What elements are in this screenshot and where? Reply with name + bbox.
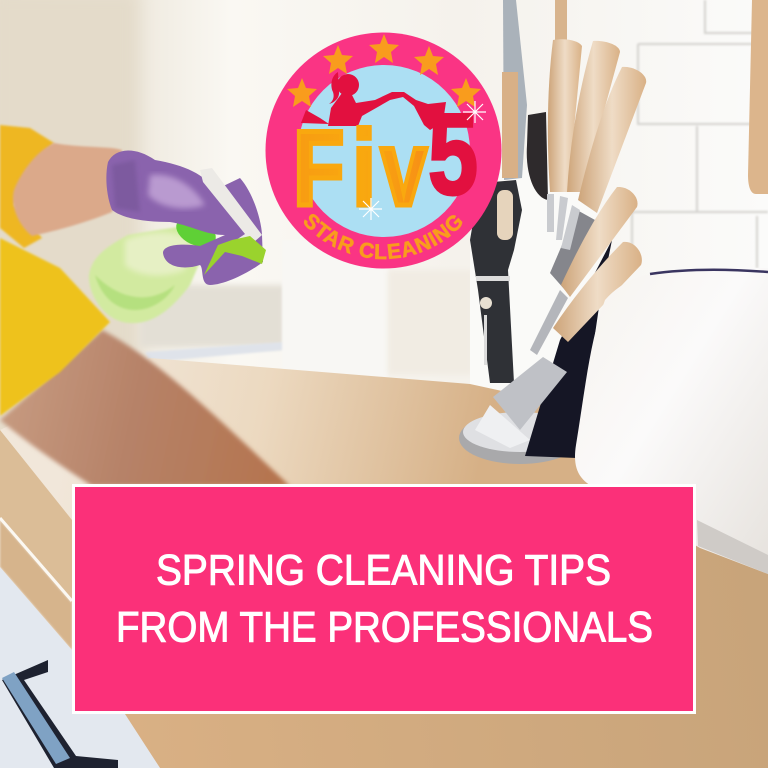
logo: five orange stars	[287, 34, 481, 107]
logo: Fiv wordmark: F	[293, 109, 344, 228]
logo: Fiv wordmark: i	[353, 109, 376, 228]
logo: red number 5: 5	[428, 91, 478, 219]
logo: Fiv5 Star Cleaning badge	[266, 32, 502, 268]
counter front edge and cabinet	[0, 430, 160, 768]
logo: light blue inner disc	[298, 65, 470, 237]
banner heading: FROM THE PROFESSIONALS	[116, 604, 653, 652]
photo: spray bottle	[89, 211, 221, 323]
logo: sparkle centre	[359, 198, 382, 220]
photo: hanging ladle	[503, 0, 567, 200]
logo: star cleaning curved text: STAR CLEANING	[304, 214, 462, 260]
photo: knife block	[459, 194, 612, 464]
photo: purple glove	[106, 150, 263, 285]
logo: cleaning lady silhouette	[301, 72, 446, 130]
countertop surface	[0, 358, 768, 768]
logo: Fiv wordmark: v	[381, 109, 427, 228]
photo: spray trigger	[200, 168, 266, 275]
banner: pink title panel	[74, 486, 694, 712]
photo: forearm in foreground	[0, 330, 290, 486]
photo: upper arm	[13, 143, 122, 236]
banner heading: SPRING CLEANING TIPS	[156, 546, 611, 594]
countertop lower wood area	[72, 520, 768, 768]
photo: toaster	[575, 268, 768, 574]
photo: scissors	[470, 72, 522, 383]
cabinet handle	[2, 660, 118, 768]
photo: wooden utensil at right	[748, 0, 768, 194]
background: white wall tiles	[618, 0, 768, 268]
logo: pink outer disc	[266, 32, 502, 268]
photo: knife handles	[548, 39, 646, 342]
logo: sparkle right	[463, 101, 486, 123]
photo: yellow sleeve	[0, 125, 110, 416]
